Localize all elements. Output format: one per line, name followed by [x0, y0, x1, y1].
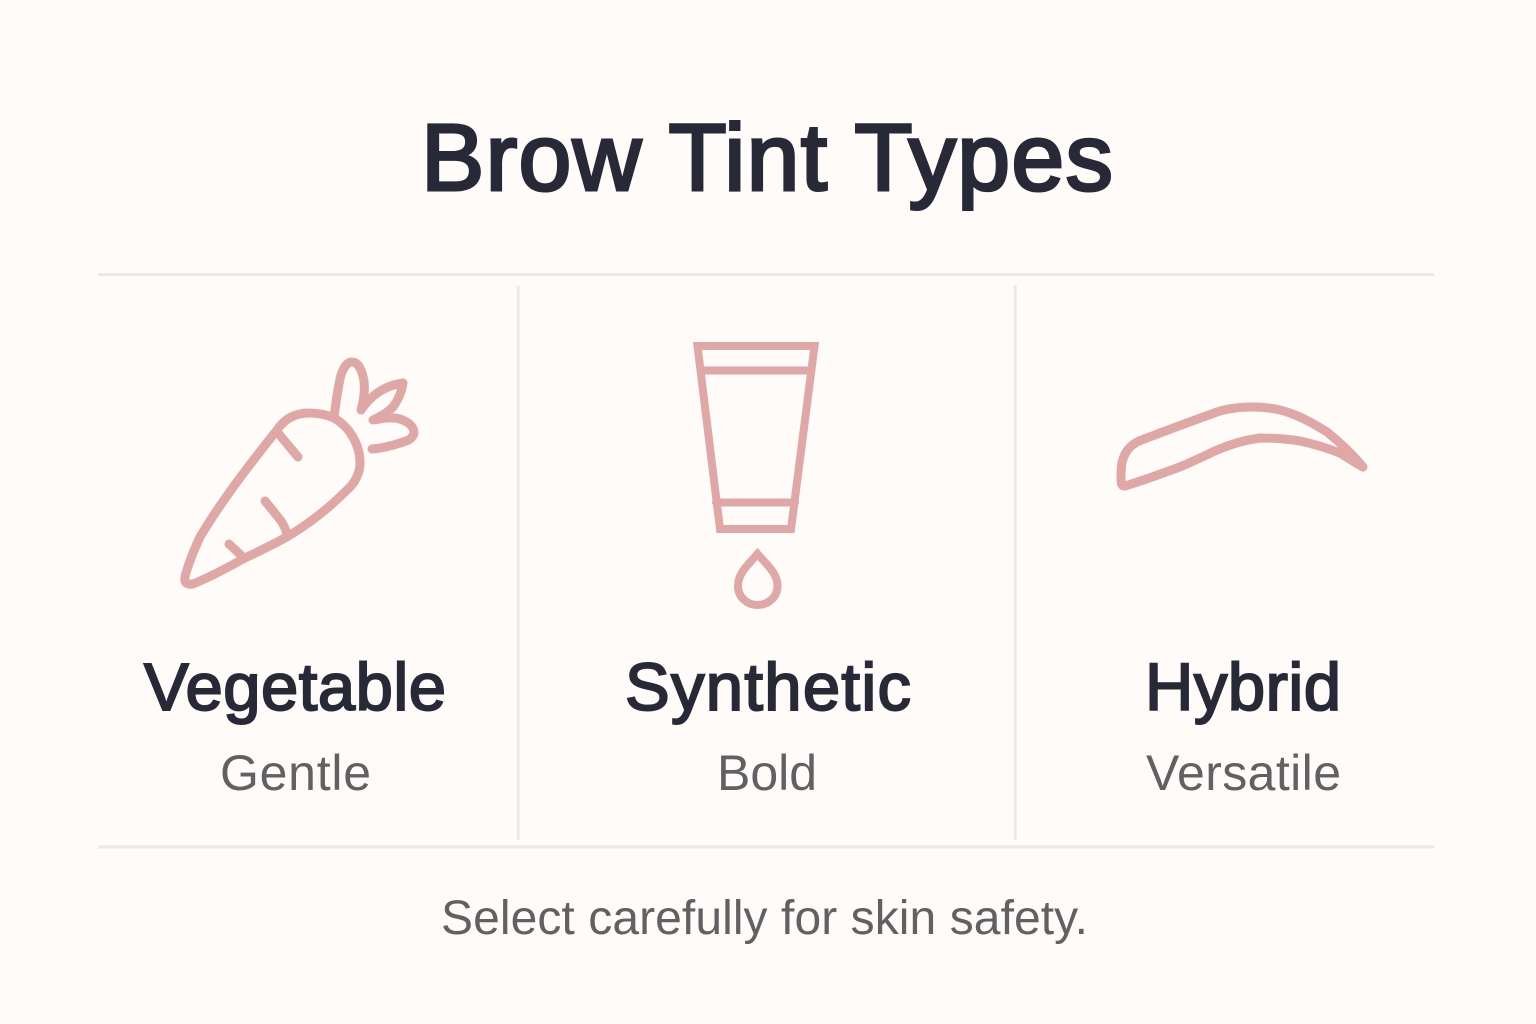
panel: vegetable — [144, 362, 446, 801]
label: versatile: Versatile — [1146, 745, 1341, 801]
icon: tube with drop — [698, 346, 814, 605]
panel: hybrid — [1121, 407, 1363, 801]
icon: eyebrow — [1121, 407, 1363, 486]
heading: synthetic: Synthetic — [625, 650, 911, 725]
label: bold: Bold — [717, 745, 817, 801]
title: Brow Tint Types — [421, 105, 1113, 211]
footer note: Select carefully for skin safety. — [441, 892, 1088, 945]
icon: carrot — [185, 362, 414, 584]
label: gentle: Gentle — [220, 745, 371, 801]
heading: vegetable: Vegetable — [144, 650, 446, 725]
heading: hybrid: Hybrid — [1145, 650, 1341, 725]
panel: synthetic — [625, 346, 911, 801]
